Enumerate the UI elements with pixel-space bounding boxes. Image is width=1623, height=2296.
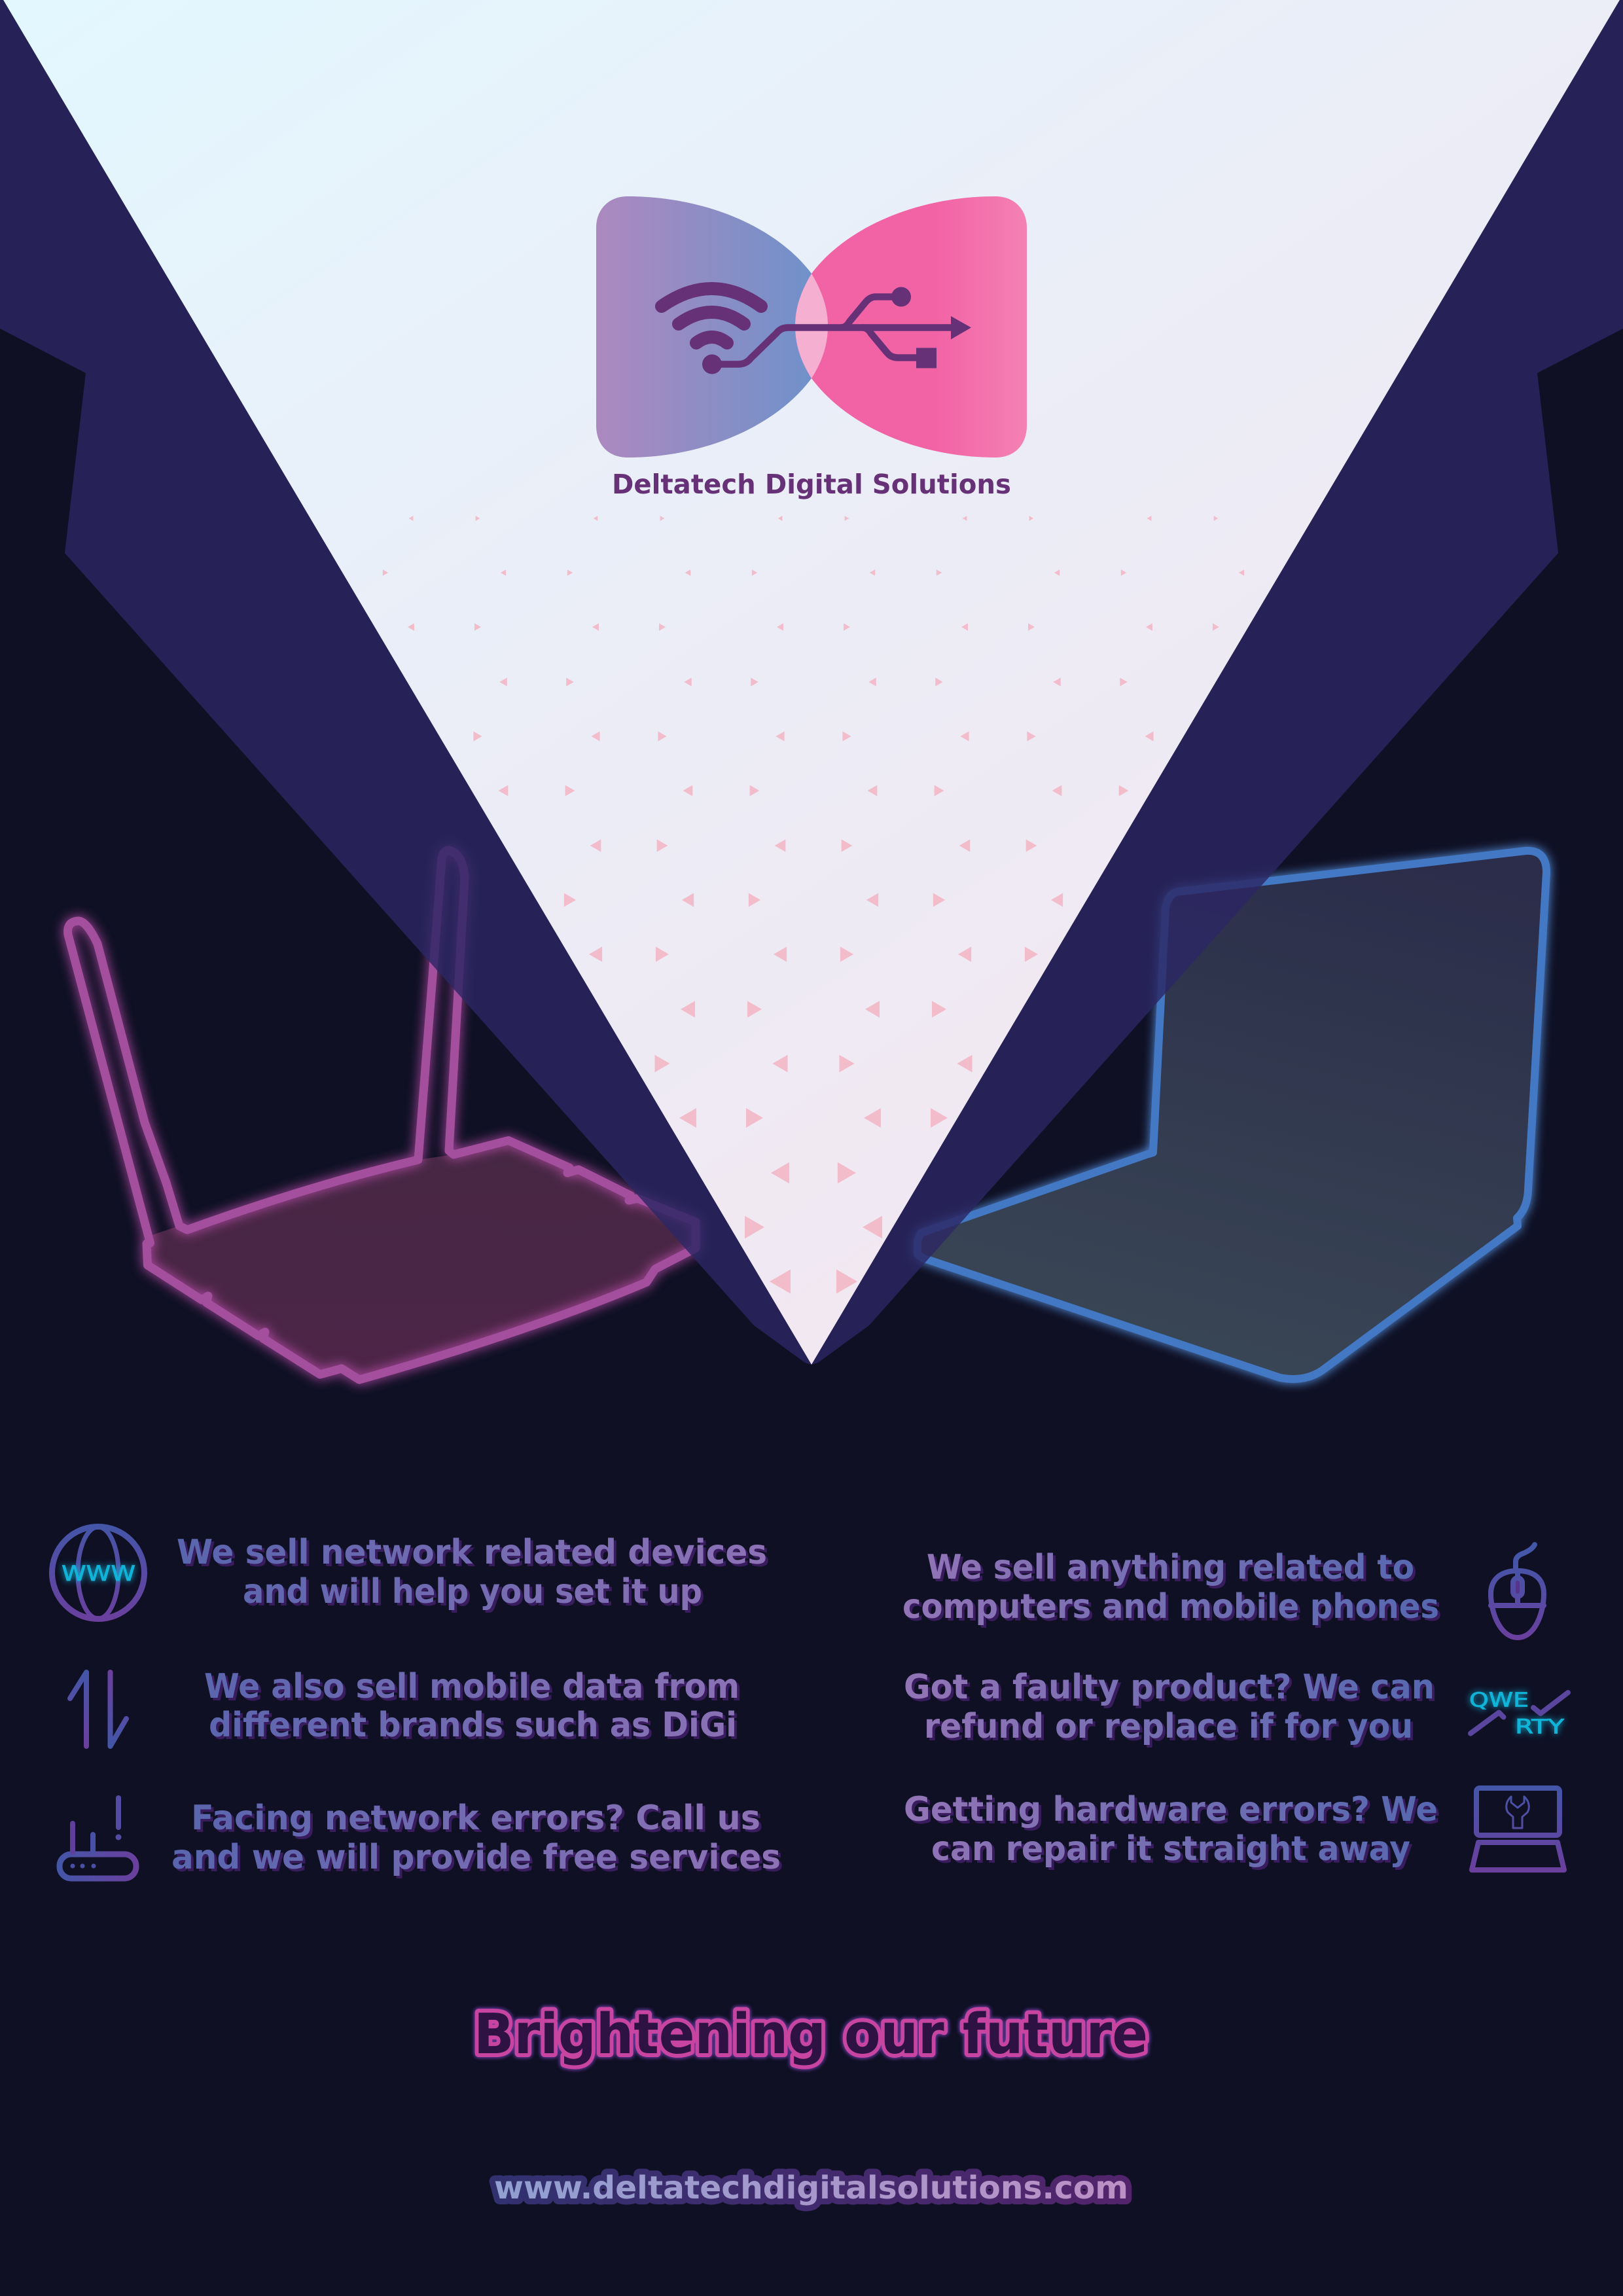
navy right band (812, 0, 1623, 1365)
text: network errors (171, 1799, 781, 1877)
icon: wifi waves (662, 289, 761, 343)
text: network errors: Facing network errors? Call us (191, 1799, 760, 1838)
text: computers and phones: We sell anything related to (927, 1548, 1414, 1587)
logo left lobe (596, 196, 828, 457)
text: network devices (177, 1533, 767, 1611)
icon: globe with www (52, 1526, 144, 1619)
text: hardware errors (904, 1790, 1438, 1869)
text: faulty product: refund or replace if for you (924, 1707, 1413, 1746)
text: mobile data: We also sell mobile data from (204, 1667, 740, 1706)
icon: up and down arrows (70, 1672, 126, 1746)
router neon illustration (68, 850, 696, 1380)
logo centre lens (795, 274, 828, 378)
icon: laptop with wrench (1472, 1788, 1564, 1870)
text: faulty product: Got a faulty product? We can (904, 1668, 1435, 1707)
triangle dot pattern (383, 516, 1244, 1293)
icon: router with alert (60, 1798, 136, 1878)
laptop neon illustration (918, 851, 1546, 1379)
router body fill (147, 1140, 696, 1380)
text: hardware errors: can repair it straight away (931, 1829, 1410, 1869)
icon: mouse (1491, 1545, 1544, 1638)
text: network devices: We sell network related devices (177, 1533, 767, 1572)
text: faulty product (904, 1668, 1435, 1746)
logo (596, 196, 1027, 500)
text: mobile data (204, 1667, 740, 1745)
icon: qwerty keys with check: RTY (1515, 1716, 1565, 1738)
text: network devices: and will help you set it up (243, 1572, 702, 1611)
icon: qwerty keys with check: QWE (1469, 1689, 1529, 1712)
logo wordmark: Deltatech Digital Solutions (612, 469, 1011, 500)
tagline: Brightening our future (474, 2002, 1148, 2067)
icon: globe with www: WWW (62, 1561, 135, 1586)
navy left band (0, 0, 812, 1365)
text: network errors: and we will provide free services (171, 1838, 781, 1877)
text: mobile data: different brands such as DiGi (209, 1706, 737, 1745)
icon: qwerty keys with check (1469, 1689, 1568, 1738)
logo right lobe (795, 196, 1027, 457)
icon: usb symbol (702, 287, 971, 374)
text: computers and phones (902, 1548, 1439, 1626)
light triangular spotlight panel (3, 0, 1620, 1365)
text: hardware errors: Getting hardware errors? We (904, 1790, 1438, 1829)
website url: www.deltatechdigitalsolutions.com (494, 2170, 1128, 2206)
text: computers and phones: computers and mobile phones (902, 1587, 1439, 1626)
router outline with antennas (68, 850, 696, 1380)
